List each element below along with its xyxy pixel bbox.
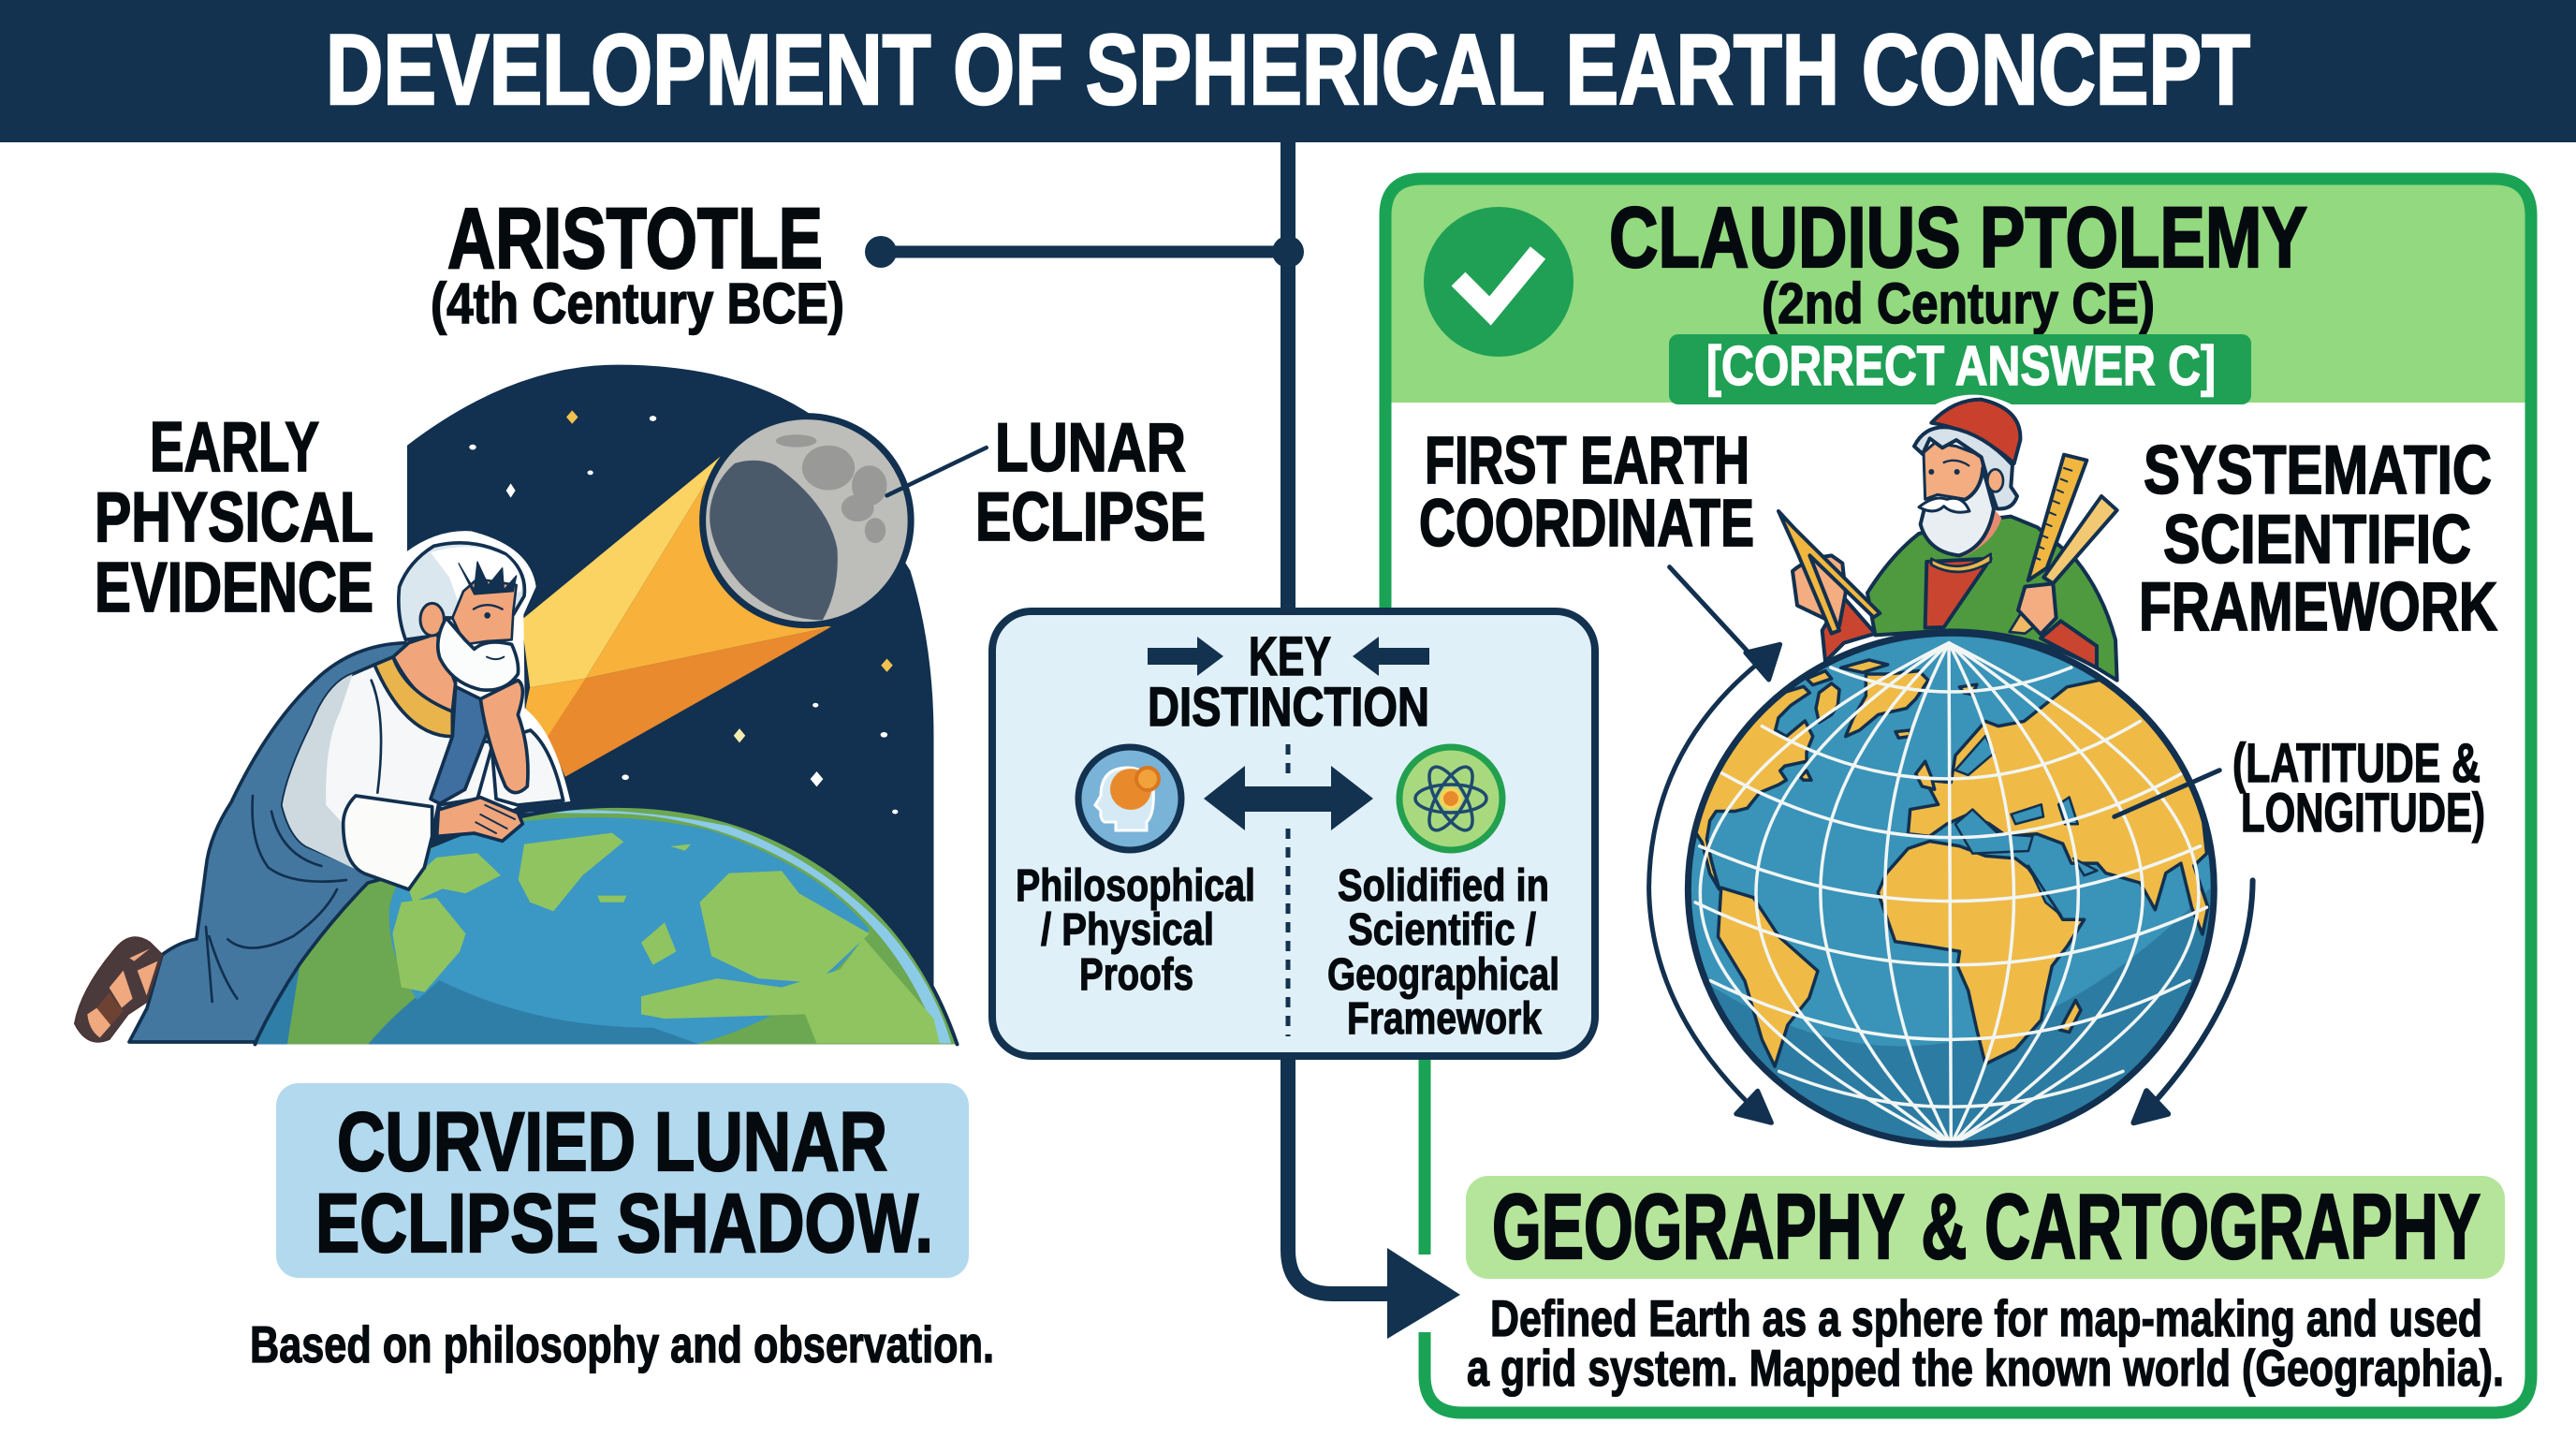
figure: Aristotle	[129, 531, 570, 1042]
night sky	[407, 365, 934, 1043]
face	[1924, 443, 1986, 499]
robe	[129, 643, 456, 1042]
arm to cheek	[480, 681, 528, 793]
red tunic	[1925, 559, 1991, 628]
latitude and longitude grid	[1695, 643, 2206, 1145]
label: lunar eclipse: LUNAR	[995, 410, 1186, 486]
heading: Aristotle: ARISTOTLE	[447, 191, 823, 286]
panel header fill	[1385, 179, 2531, 403]
callout: curved lunar eclipse shadow: ECLIPSE SHADOW.	[315, 1176, 933, 1269]
right sleeve	[491, 730, 564, 805]
leader: first earth coordinate	[1670, 567, 1753, 657]
dashed divider	[1286, 744, 1290, 1036]
connector timeline arrow	[1288, 142, 1460, 1339]
rotation arrow left	[1649, 644, 1780, 1123]
label: systematic scientific framework	[2139, 433, 2497, 645]
text: solidified in scientific / geographical framework: Scientific /	[1348, 905, 1536, 955]
ruler	[2028, 455, 2086, 580]
heading: Claudius Ptolemy: CLAUDIUS PTOLEMY	[1609, 190, 2307, 286]
description text	[1467, 1289, 2504, 1397]
neck and collar	[1963, 508, 2001, 557]
label: early physical evidence	[95, 407, 373, 626]
green cloak	[1867, 517, 2117, 681]
hat	[1931, 400, 2020, 463]
white cutout halo	[381, 531, 570, 836]
ear	[420, 603, 444, 636]
callout: curved lunar eclipse shadow: CURVIED LUNAR	[337, 1094, 887, 1188]
moon	[703, 417, 911, 625]
hair spikes	[459, 562, 517, 594]
caption: Based on philosophy and observation.	[250, 1315, 994, 1373]
label: lunar eclipse	[975, 410, 1206, 555]
heading: key distinction: KEY	[1249, 626, 1331, 687]
inland seas	[1955, 736, 2097, 915]
figure: Ptolemy	[1778, 395, 2117, 681]
eye and brow	[474, 605, 503, 609]
label: latitude and longitude	[2232, 733, 2485, 844]
correct answer badge: [CORRECT ANSWER C]	[1706, 335, 2216, 397]
label: latitude and longitude: (LATITUDE &	[2232, 733, 2481, 794]
text: philosophical / physical proofs: / Physical	[1041, 905, 1214, 955]
panel: Claudius Ptolemy	[1385, 179, 2531, 1413]
label: first earth coordinate	[1419, 424, 1754, 561]
hair	[1914, 427, 2017, 508]
rotation arrow right	[2133, 880, 2253, 1123]
label: early physical evidence: PHYSICAL	[95, 477, 373, 556]
collar	[374, 657, 452, 737]
text: philosophical / physical proofs: Philosophical	[1016, 861, 1255, 911]
left red sleeve	[1822, 596, 1875, 662]
Old World continents	[1718, 680, 2208, 1066]
forearm sleeve	[344, 796, 432, 889]
neck	[393, 634, 456, 712]
New World continents	[1688, 660, 1935, 889]
text: solidified in scientific / geographical framework: Framework	[1347, 994, 1542, 1044]
icon: philosophy head	[1078, 747, 1181, 850]
icon: atom	[1399, 747, 1502, 850]
tunic	[283, 665, 493, 889]
arrow: pointing left	[1353, 637, 1429, 676]
label: early physical evidence: EVIDENCE	[95, 548, 373, 626]
hand on globe	[437, 798, 522, 841]
eyes	[1928, 469, 1934, 475]
moon leader line	[887, 448, 987, 495]
face	[452, 579, 517, 644]
check badge icon	[1424, 207, 1573, 357]
beard	[1921, 468, 1994, 555]
beard	[438, 618, 519, 690]
hair	[399, 543, 524, 639]
right hand	[2018, 583, 2056, 634]
callout: curved lunar eclipse shadow	[276, 1083, 969, 1278]
rolled scroll	[2043, 496, 2117, 583]
panel green border	[1385, 179, 2531, 1413]
text: solidified in scientific / geographical framework: Solidified in	[1338, 861, 1549, 911]
heading: key distinction: DISTINCTION	[1148, 677, 1429, 738]
moustache	[1919, 498, 1969, 512]
illustration: globe	[1649, 567, 2253, 1177]
label: lunar eclipse: ECLIPSE	[975, 479, 1206, 555]
globe body	[1672, 633, 2231, 1177]
text: solidified in scientific / geographical framework	[1327, 861, 1559, 1044]
illustration: sky, eclipse and earth	[255, 365, 987, 1044]
left hand	[1793, 555, 1846, 625]
text: solidified in scientific / geographical framework: Geographical	[1327, 950, 1559, 1000]
text: philosophical / physical proofs	[1016, 861, 1255, 1000]
label: latitude and longitude: LONGITUDE)	[2241, 783, 2485, 844]
arrow: pointing right	[1148, 637, 1223, 676]
date: 2nd Century CE: (2nd Century CE)	[1762, 271, 2155, 335]
label: systematic scientific framework: SYSTEMATIC	[2144, 433, 2492, 508]
right red sleeve	[2041, 621, 2097, 668]
text: philosophical / physical proofs: Proofs	[1079, 950, 1193, 1000]
double-headed arrow	[1204, 766, 1373, 830]
icon: sandal foot	[75, 937, 162, 1042]
connector: Aristotle dot and line	[865, 236, 1304, 268]
heading: key distinction	[1148, 626, 1429, 738]
stars	[469, 410, 898, 814]
land masses	[392, 833, 940, 1043]
label: first earth coordinate: COORDINATE	[1419, 487, 1754, 561]
label: early physical evidence: EARLY	[150, 407, 319, 486]
ear	[1987, 469, 2003, 492]
hat halo	[1933, 395, 2014, 405]
eclipse shadow beam	[521, 454, 831, 777]
leader: latitude and longitude	[2115, 770, 2219, 816]
blue sash	[431, 686, 487, 803]
date: 4th Century BCE: (4th Century BCE)	[431, 271, 844, 335]
earth	[255, 806, 957, 1044]
header bar	[0, 0, 2576, 142]
panel: key distinction	[992, 611, 1595, 1056]
label: systematic scientific framework: SCIENTIFIC	[2163, 502, 2471, 578]
label: first earth coordinate: FIRST EARTH	[1425, 424, 1749, 498]
robe folds	[206, 796, 346, 1002]
pencil	[1778, 511, 1880, 634]
